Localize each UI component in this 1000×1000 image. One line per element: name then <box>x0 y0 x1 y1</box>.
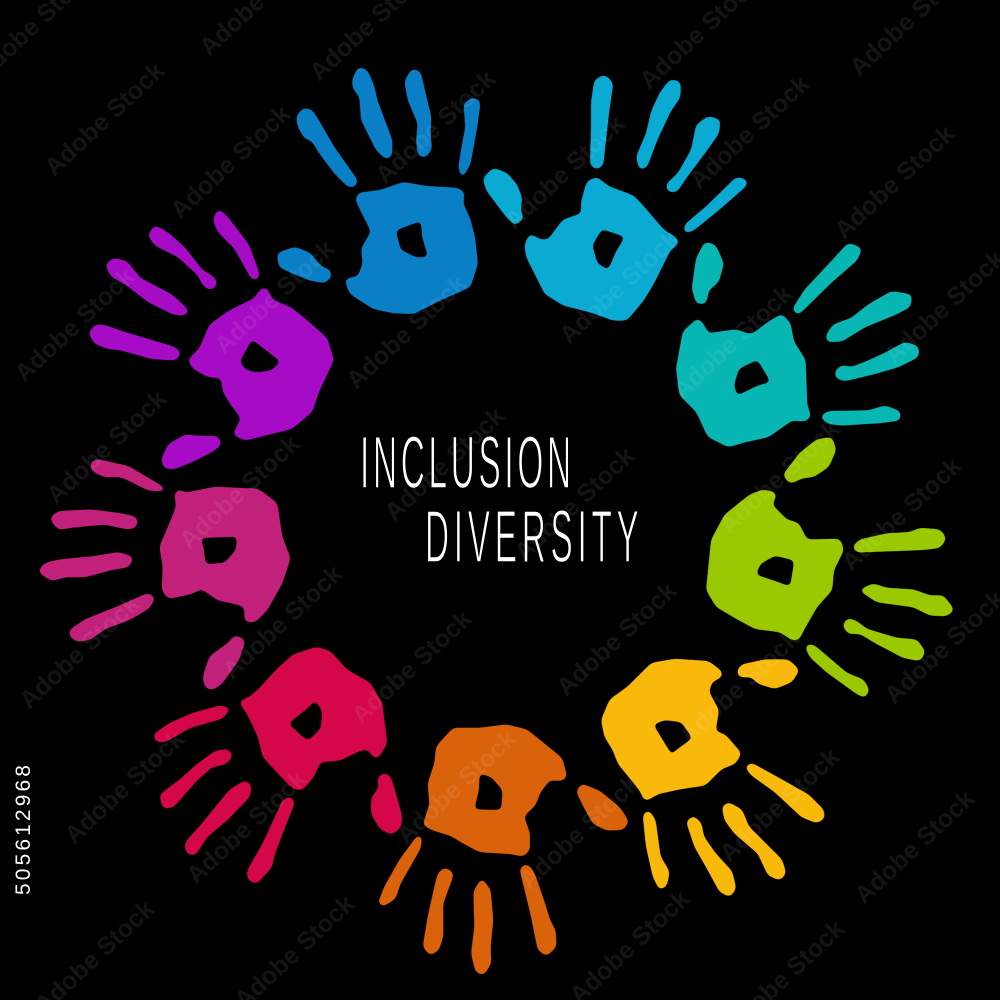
hand: magenta <box>38 459 290 690</box>
fingers: green <box>805 528 954 698</box>
watermark: repeated stock text: Adobe Stock <box>165 100 296 224</box>
fingers: crimson <box>153 706 294 883</box>
palm: yellow <box>602 659 741 801</box>
watermark: repeated stock text: Adobe Stock <box>674 625 805 749</box>
watermark: repeated stock text: Adobe Stock <box>509 442 640 566</box>
hand: green <box>707 437 954 698</box>
watermark: repeated stock text: Adobe Stock <box>39 57 170 181</box>
watermark: repeated stock text: Adobe Stock <box>217 560 348 684</box>
watermark: repeated stock text: Adobe Stock <box>341 270 472 394</box>
fingers: cyan <box>591 75 747 233</box>
palm: crimson <box>239 647 387 790</box>
thumb: purple <box>162 435 221 468</box>
fingers: magenta <box>38 459 165 642</box>
fingers: blue <box>297 67 480 187</box>
hand: purple <box>89 209 333 468</box>
watermark: repeated stock text: Adobe Stock <box>836 452 967 576</box>
fingers: purple <box>89 209 258 360</box>
watermark: repeated stock text: Adobe Stock <box>849 785 980 909</box>
thumb: yellow <box>738 660 799 688</box>
thumb: green <box>783 437 836 483</box>
palm: cyan <box>525 177 678 320</box>
hand: teal <box>677 242 918 447</box>
watermark: repeated stock text: Adobe Stock <box>829 120 960 244</box>
fingers: teal <box>792 243 918 425</box>
watermark: repeated stock text: Adobe Stock <box>714 743 845 867</box>
watermark: repeated stock text: Adobe Stock <box>714 415 845 539</box>
watermark: repeated stock text: Adobe Stock <box>499 110 630 234</box>
watermark: repeated stock text: Adobe Stock <box>379 402 510 526</box>
thumb: teal <box>692 242 723 303</box>
watermark: repeated stock text: Adobe Stock <box>14 590 145 714</box>
watermark: repeated stock text: Adobe Stock <box>59 725 190 849</box>
watermark: repeated stock text: Adobe Stock <box>9 263 140 387</box>
thumb: orange <box>577 784 628 830</box>
thumb: cyan <box>483 168 523 225</box>
stock id number: 505612968 <box>12 765 35 895</box>
title: diversity: DIVERSITY <box>425 496 639 579</box>
hand: crimson <box>153 647 402 883</box>
watermark: repeated stock text: Adobe Stock <box>181 765 312 889</box>
thumb: magenta <box>203 636 245 690</box>
watermark: repeated stock text: Adobe Stock <box>514 770 645 894</box>
watermark: repeated stock text: Adobe Stock <box>684 70 815 194</box>
fingers: orange <box>378 835 556 975</box>
watermark: repeated stock text: Adobe Stock <box>391 725 522 849</box>
watermark: repeated stock text: Adobe Stock <box>41 385 172 509</box>
palm: orange <box>423 725 567 856</box>
watermark: repeated stock text: Adobe Stock <box>554 225 685 349</box>
hand: blue <box>277 67 480 313</box>
watermark: repeated stock text: Adobe Stock <box>370 65 501 189</box>
watermark: repeated stock text: Adobe Stock <box>346 605 477 729</box>
thumb: blue <box>277 247 331 283</box>
palm: blue <box>345 183 477 313</box>
hand: orange <box>378 725 628 975</box>
watermark: repeated stock text: Adobe Stock <box>174 430 305 554</box>
palm: purple <box>188 288 333 440</box>
palm: magenta <box>160 487 290 622</box>
watermark: repeated stock text: Adobe Stock <box>667 280 798 404</box>
palm: teal <box>677 314 811 447</box>
hand: yellow <box>602 659 824 897</box>
fingers: yellow <box>643 763 824 897</box>
watermark: repeated stock text: Adobe Stock <box>209 235 340 359</box>
thumb: crimson <box>372 773 402 834</box>
watermark: repeated stock text: Adobe Stock <box>551 577 682 701</box>
hand: cyan <box>483 75 747 320</box>
title: inclusion: INCLUSION <box>360 422 571 505</box>
palm: green <box>707 490 843 640</box>
